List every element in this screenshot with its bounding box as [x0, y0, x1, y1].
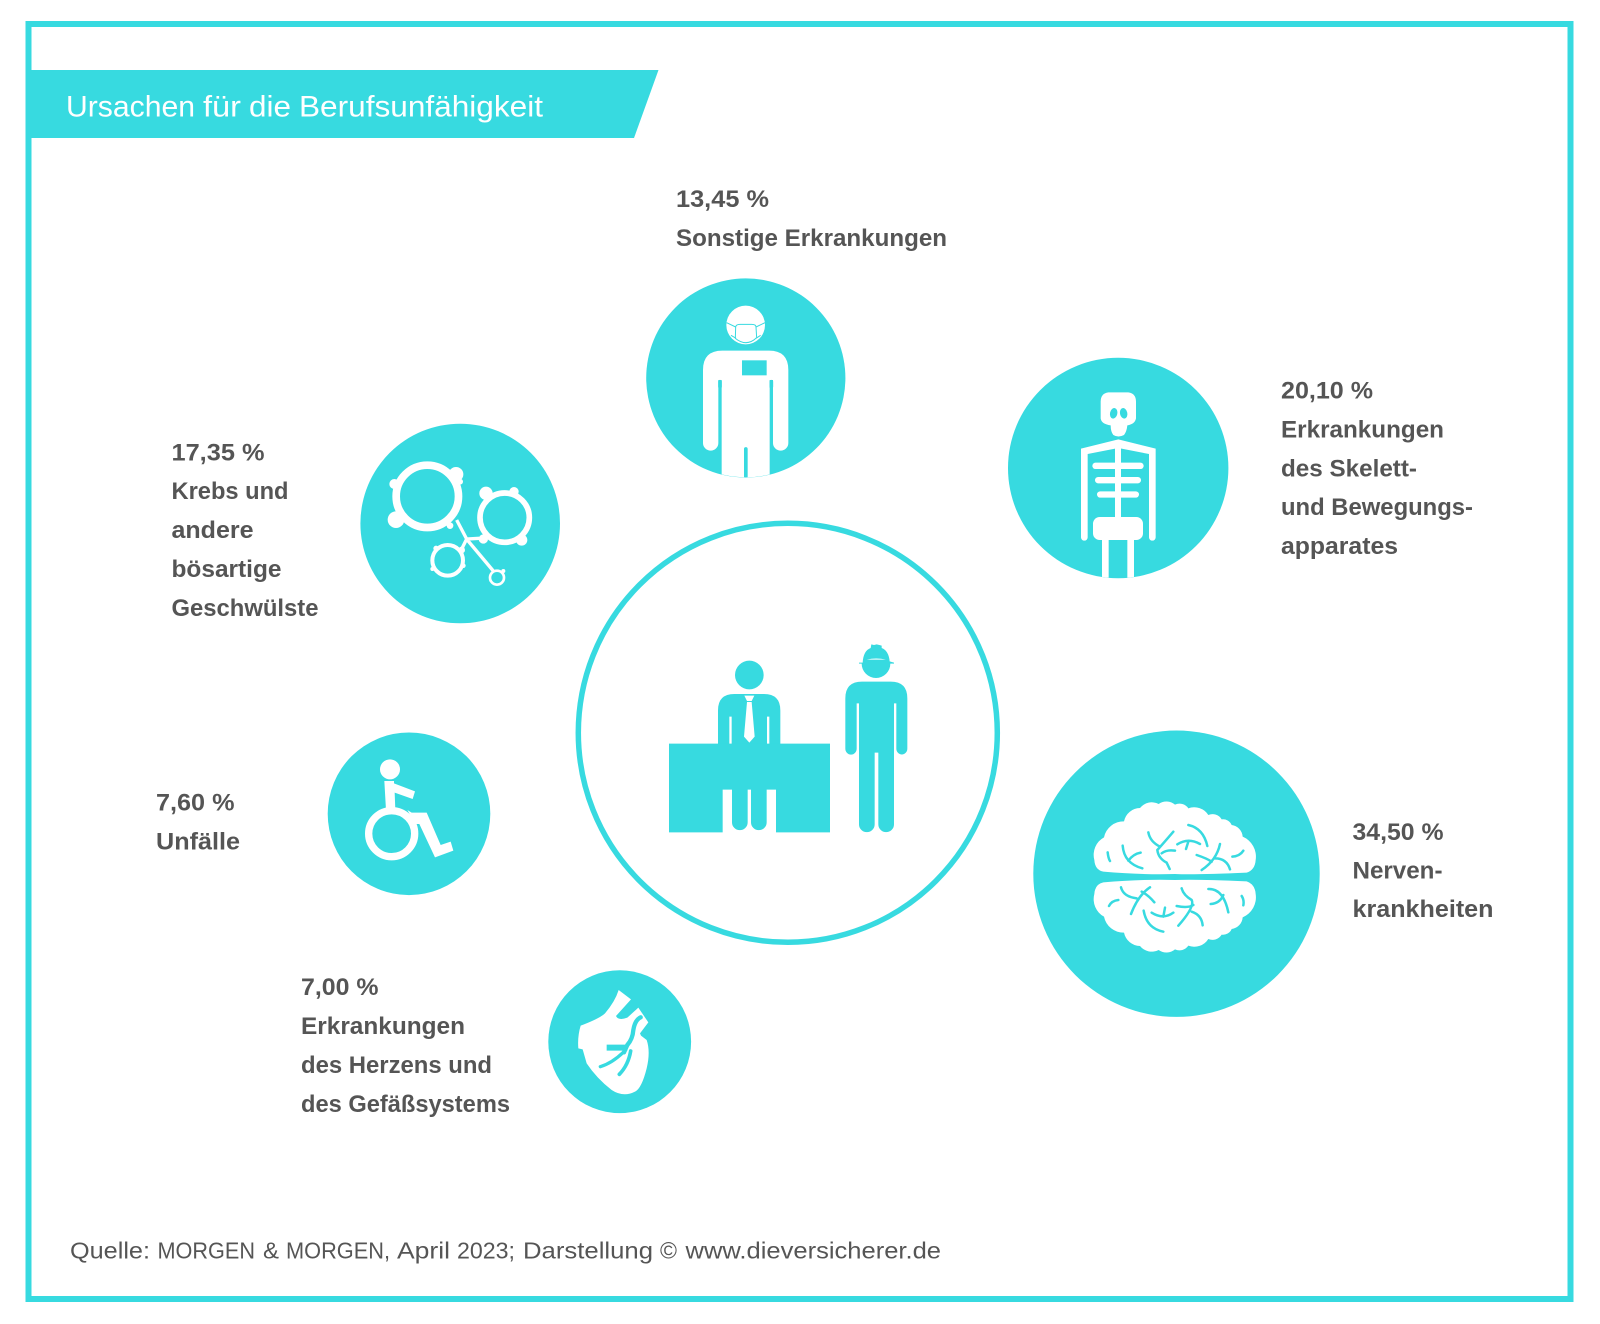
- title banner: [26, 70, 658, 138]
- source note: 2023;: [457, 1238, 515, 1264]
- panel: Sonstige Erkrankungen: [646, 186, 947, 503]
- circle: [360, 424, 560, 623]
- label: 20,10 %: des Skelett-: [1281, 456, 1417, 482]
- panel: center circle with workers: [578, 523, 997, 942]
- source note: www.dieversicherer.de: [684, 1238, 941, 1264]
- label: 20,10 %: 20,10 %: [1281, 378, 1373, 404]
- source note: Darstellung: [523, 1238, 653, 1264]
- label: 20,10 %: und Bewegungs-: [1281, 494, 1473, 521]
- label: 7,00 %: des Gefäßsystems: [301, 1091, 510, 1118]
- label: 13,45 %: [676, 186, 947, 252]
- label: 20,10 %: Erkrankungen: [1281, 416, 1444, 444]
- label: 20,10 %: [1281, 378, 1473, 560]
- label: 7,60 %: Unfälle: [156, 828, 240, 856]
- panel: Nervenkrankheiten: [1033, 730, 1494, 1017]
- label: 13,45 %: 13,45 %: [676, 186, 769, 213]
- label: 7,60 %: 7,60 %: [156, 790, 234, 816]
- label: 7,00 %: des Herzens und: [301, 1052, 492, 1079]
- source note: &: [263, 1238, 279, 1264]
- label: 7,00 %: 7,00 %: [301, 974, 378, 1001]
- circle: [1008, 358, 1228, 578]
- icon: skeleton: [1081, 392, 1156, 582]
- panel: Krebs: [172, 424, 560, 623]
- circle: [328, 732, 490, 895]
- label: 34,50 %: Nerven-: [1352, 858, 1442, 884]
- source note: MORGEN,: [286, 1238, 390, 1264]
- label: 17,35 %: bösartige: [172, 556, 282, 583]
- icon: office worker and construction worker: [669, 644, 907, 832]
- label: 17,35 %: andere: [172, 517, 254, 544]
- label: 7,00 %: Erkrankungen: [301, 1013, 465, 1040]
- source note: Quelle:: [70, 1238, 150, 1264]
- circle: [548, 970, 691, 1113]
- label: 20,10 %: apparates: [1281, 533, 1398, 560]
- icon: brain: [1094, 802, 1256, 952]
- label: 17,35 %: [172, 440, 318, 622]
- label: 7,60 %: [156, 790, 240, 856]
- title: Berufsunfähigkeit: [299, 90, 544, 124]
- title: für: [203, 90, 241, 124]
- label: 7,00 %: [301, 974, 510, 1118]
- label: 13,45 %: Sonstige Erkrankungen: [676, 225, 947, 252]
- icon: person with mask: [703, 306, 788, 478]
- icon: cancer cells: [388, 465, 529, 585]
- label: 17,35 %: Geschwülste: [172, 595, 318, 622]
- source note: ©: [660, 1238, 677, 1264]
- ring: [578, 523, 997, 942]
- title: die: [249, 90, 291, 124]
- label: 34,50 %: krankheiten: [1352, 896, 1494, 923]
- panel: Herz und Gefäße: [301, 970, 691, 1118]
- label: 34,50 %: 34,50 %: [1352, 819, 1444, 846]
- title: Ursachen: [66, 90, 195, 124]
- label: 34,50 %: [1352, 819, 1494, 923]
- circle: [646, 278, 845, 478]
- source note: April: [397, 1238, 450, 1264]
- source note: [70, 1238, 941, 1264]
- panel: Unfälle: [156, 732, 490, 895]
- panel: Skelett und Bewegungsapparat: [1008, 358, 1473, 582]
- circle: [1033, 730, 1320, 1017]
- source note: MORGEN: [158, 1238, 255, 1264]
- label: 17,35 %: 17,35 %: [172, 440, 264, 466]
- icon: heart: [578, 990, 649, 1094]
- label: 17,35 %: Krebs und: [172, 478, 288, 505]
- icon: wheelchair: [369, 759, 453, 857]
- banner shape: [26, 70, 658, 138]
- title: [66, 90, 544, 124]
